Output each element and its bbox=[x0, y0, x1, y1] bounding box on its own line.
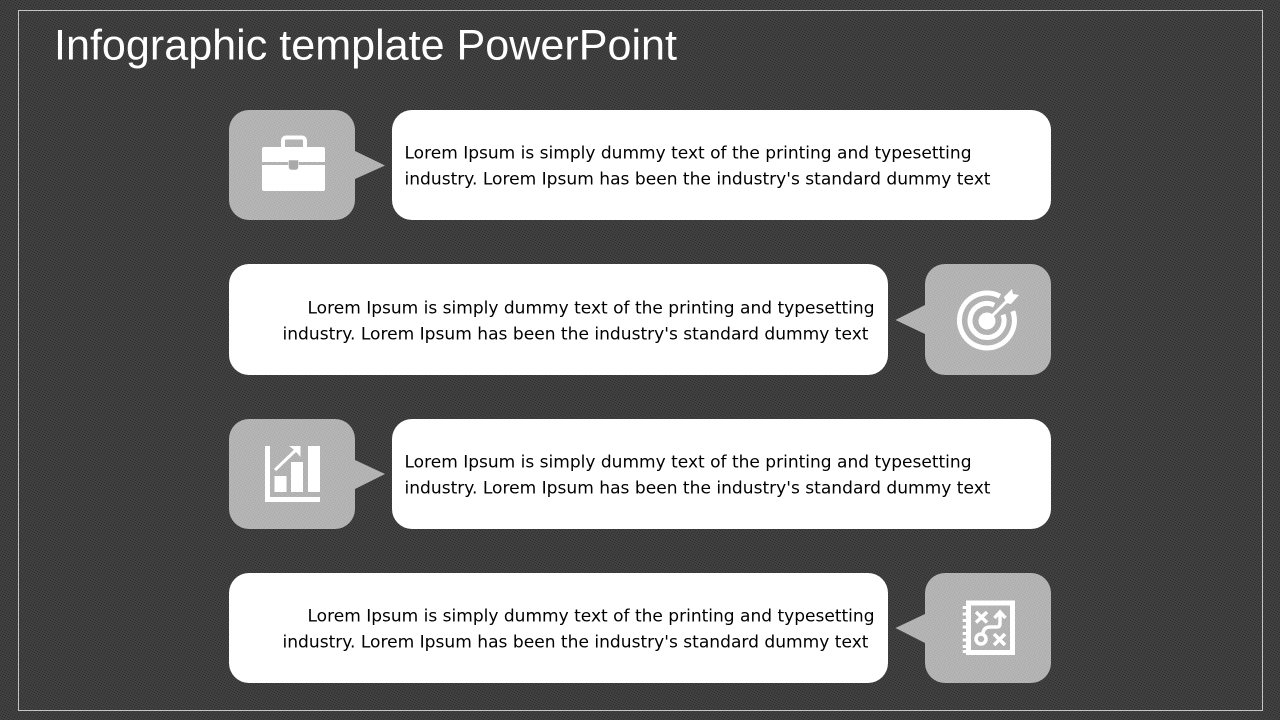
icon panel with pointer: strategy map bbox=[896, 573, 1051, 683]
body text bbox=[404, 144, 991, 190]
body text: industry. Lorem Ipsum has been the industry's standard dummy text bbox=[404, 170, 991, 190]
text panel bbox=[392, 419, 1051, 529]
row 2 bbox=[229, 264, 1051, 375]
icon panel with pointer: target bbox=[896, 264, 1051, 375]
title: Infographic template PowerPoint bbox=[54, 22, 677, 70]
icon: growth bar chart bbox=[265, 446, 320, 502]
body text: industry. Lorem Ipsum has been the industry's standard dummy text bbox=[282, 324, 869, 344]
body text bbox=[404, 452, 991, 498]
row 4 bbox=[229, 573, 1051, 683]
row 1 bbox=[229, 110, 1051, 220]
body text: industry. Lorem Ipsum has been the industry's standard dummy text bbox=[404, 478, 991, 498]
body text bbox=[282, 298, 874, 344]
body text: Lorem Ipsum is simply dummy text of the printing and typesetting bbox=[308, 606, 874, 626]
icon: target with arrow bbox=[959, 289, 1019, 348]
body text: Lorem Ipsum is simply dummy text of the printing and typesetting bbox=[308, 298, 874, 318]
body text bbox=[282, 606, 874, 652]
row 3 bbox=[229, 419, 1051, 529]
icon: strategy map bbox=[964, 603, 1012, 653]
text panel bbox=[229, 264, 888, 375]
body text: Lorem Ipsum is simply dummy text of the printing and typesetting bbox=[404, 144, 972, 164]
text panel bbox=[229, 573, 888, 683]
icon: briefcase bbox=[262, 138, 325, 191]
body text: industry. Lorem Ipsum has been the industry's standard dummy text bbox=[282, 632, 869, 652]
icon panel with pointer: chart bbox=[229, 419, 385, 529]
icon panel with pointer: briefcase bbox=[229, 110, 385, 220]
body text: Lorem Ipsum is simply dummy text of the printing and typesetting bbox=[404, 452, 972, 472]
text panel bbox=[392, 110, 1051, 220]
